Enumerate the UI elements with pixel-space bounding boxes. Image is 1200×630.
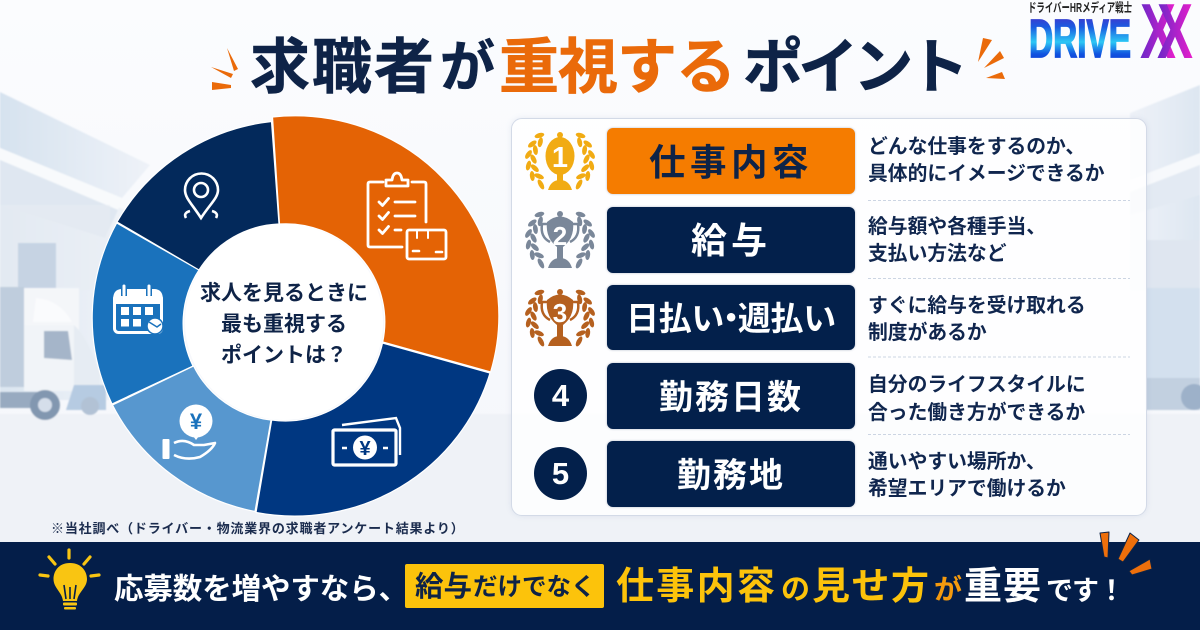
segment: salary: [256, 343, 490, 516]
row 3 label: ・: [715, 300, 747, 337]
chart: donut of priorities: [92, 116, 498, 516]
row 5 label: [607, 440, 855, 506]
row 2 label: 給与: [691, 220, 771, 261]
icon: rank 5 badge: [534, 447, 587, 500]
icon: banknotes: ¥: [359, 438, 371, 460]
donut center text: 最も重視する: [221, 313, 347, 336]
icon: map pin: [185, 174, 218, 218]
icon: rank 1 medal: [525, 132, 595, 190]
title: 重視する: [499, 34, 735, 101]
row 5 description: 希望エリアで働けるか: [868, 478, 1066, 500]
banner lead text: 応募数を増やすなら、: [114, 573, 408, 606]
banner highlight box: [405, 564, 604, 608]
icon: calendar: [113, 286, 163, 334]
banner highlight box: だけでなく: [473, 574, 596, 601]
row 1 label: 仕事内容: [649, 142, 813, 183]
bottom banner: [0, 542, 1200, 630]
banner key message: [616, 566, 1124, 608]
title: 求職者: [250, 34, 436, 101]
row 1 description: 具体的にイメージできるか: [868, 163, 1105, 185]
row 3 label: [607, 285, 855, 350]
row 5 description: 通いやすい場所か、: [868, 451, 1046, 473]
icon: clipboard and parcel: [368, 173, 446, 259]
segment: location: [117, 122, 279, 270]
panel: ranking list: [511, 118, 1147, 516]
icon: rank 1 medal: 1: [552, 142, 568, 174]
row 3 description: 制度があるか: [868, 322, 987, 344]
banner key message: 仕事内容: [616, 566, 777, 608]
banner key message: が: [934, 574, 962, 605]
row 5 description: [868, 451, 1066, 500]
logo: DRIVE X: ドライバーHRメディア戦士: [1028, 0, 1132, 15]
banner key message: です！: [1046, 576, 1124, 606]
icon: rank 2 medal: 2: [553, 221, 567, 251]
row 4 label: 勤務日数: [659, 378, 803, 416]
title: が: [440, 36, 495, 98]
icon: light bulb: [38, 548, 101, 610]
title: [250, 34, 964, 101]
row 1 description: [868, 136, 1105, 185]
row 1 description: どんな仕事をするのか、: [868, 136, 1085, 158]
icon: title bursts: [211, 38, 1005, 90]
icon: yen on hand: [162, 404, 215, 459]
donut center text: ポイントは？: [221, 344, 347, 367]
row 4 description: [868, 374, 1086, 424]
icon: banner burst: [1100, 532, 1152, 575]
row 5 label: 勤務地: [677, 456, 785, 494]
source note: ※当社調べ（ドライバー・物流業界の求職者アンケート結果より）: [51, 521, 465, 536]
row 1 label: [607, 128, 855, 194]
donut center text: [200, 282, 368, 367]
row 3 label: 日払い 週払い: [626, 300, 836, 337]
row 2 label: [607, 206, 855, 272]
segment: work content: [272, 116, 499, 372]
banner key message: の: [781, 574, 810, 606]
row 3 description: [868, 294, 1086, 344]
icon: rank 4 badge: [534, 369, 587, 422]
row 4 description: 自分のライフスタイルに: [868, 374, 1086, 396]
row 2 description: 給与額や各種手当、: [868, 216, 1046, 238]
icon: rank 5 badge: 5: [552, 456, 569, 491]
center hole: [185, 224, 383, 420]
banner highlight box: 給与: [415, 571, 472, 603]
row 4 description: 合った働き方ができるか: [868, 402, 1085, 424]
donut center text: 求人を見るときに: [200, 282, 368, 305]
row 2 description: [868, 216, 1046, 265]
icon: rank 2 medal: [525, 211, 595, 268]
segment: daily pay: [112, 366, 271, 512]
banner key message: 重要: [964, 566, 1042, 608]
icon: yen on hand: ¥: [190, 409, 203, 434]
icon: banknotes: [333, 418, 400, 465]
banner key message: 見せ方: [812, 566, 931, 608]
icon: rank 3 medal: [525, 289, 595, 346]
row 2 description: 支払い方法など: [868, 243, 1006, 265]
segment: working days: [92, 223, 199, 404]
title: ポイント: [743, 34, 964, 101]
row 3 description: すぐに給与を受け取れる: [868, 295, 1086, 317]
row 4 label: [607, 362, 855, 428]
icon: rank 3 medal: 3: [553, 298, 567, 328]
icon: rank 4 badge: 4: [552, 378, 569, 413]
